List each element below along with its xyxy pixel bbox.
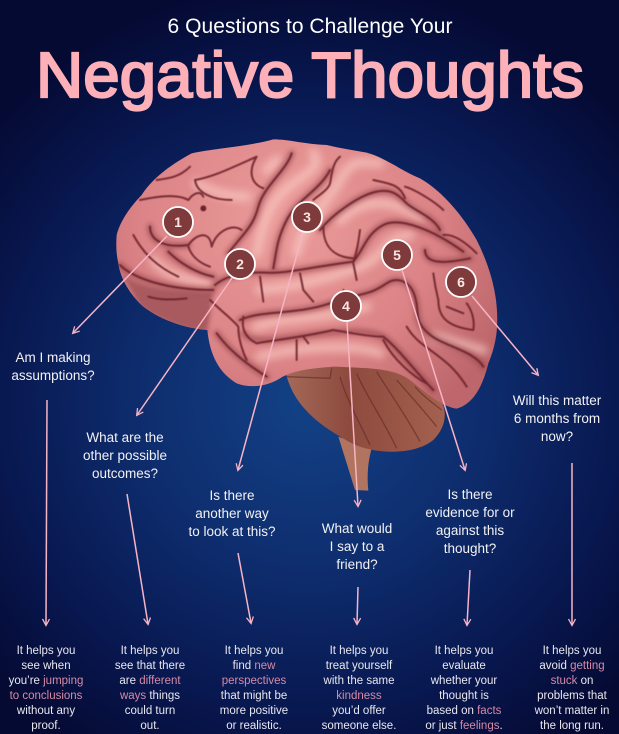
arrow 5 [402,270,465,470]
explanations [9,645,609,732]
lower frontal lobe shade [122,273,213,333]
brain stem [338,437,372,491]
question 5: evidence for or [425,505,515,520]
question 5: against this [436,523,504,538]
explanation 2: out. [140,720,160,732]
badge 1: 1 [174,214,182,230]
explanation 3: more positive [220,705,288,717]
question 2: other possible [83,448,167,463]
question 1: Am I making [15,350,91,365]
questions [11,350,602,572]
explanation 1: see when [21,660,71,672]
explanation 6: the long run. [540,720,604,732]
question 2: What are the [86,430,164,445]
explanation 1: to conclusions [10,690,83,702]
explanation 5: or just feelings. [425,720,503,732]
badge 6: 6 [457,274,465,290]
explanation 6: problems that [537,690,608,702]
explanation 1: without any [16,705,75,717]
number badges [163,202,476,321]
badge 4 [331,291,361,321]
explanation 3: or realistic. [226,720,282,732]
explanation 2: could turn [125,705,175,717]
arrow down 5 [467,570,470,625]
explanation 5: based on facts [427,705,501,717]
cerebrum [116,139,497,409]
cerebellum [285,365,445,452]
explanation 2: ways things [120,690,180,702]
arrow down 4 [357,587,358,624]
question 3: to look at this? [188,524,276,539]
explanation 3: that might be [221,690,287,702]
arrow down 6 [571,463,573,625]
pit on gyrus [200,205,206,211]
subtitle: 6 Questions to Challenge Your [168,15,452,38]
question 3: Is there [209,488,255,503]
explanation 3: find new [233,660,275,672]
question 4: I say to a [330,539,385,554]
explanation 1: proof. [31,720,61,732]
question 2: outcomes? [92,466,158,481]
arrow 4 [347,322,358,506]
explanation 4: you’d offer [332,705,386,717]
highlights [153,153,483,357]
explanation 5: thought is [439,690,489,702]
title: Negative Thoughts [36,39,584,111]
arrow down 1 [46,400,47,625]
explanation 6: avoid getting [539,660,605,672]
badge 3: 3 [303,209,311,225]
question 6: now? [541,429,573,444]
badge 3 [292,202,322,232]
badge 5: 5 [393,247,401,263]
explanation 4: with the same [323,675,394,687]
question 5: thought? [444,541,496,556]
explanation 2: It helps you [121,645,179,657]
brain illustration [116,139,497,491]
badge 5 [382,240,412,270]
explanation 4: It helps you [330,645,388,657]
badge 6 [446,267,476,297]
explanation 2: see that there [115,660,185,672]
explanation 3: It helps you [225,645,283,657]
explanation 4: kindness [336,690,382,702]
badge 2: 2 [236,256,244,272]
arrow down 3 [238,553,251,623]
explanation 3: perspectives [222,675,287,687]
question 5: Is there [447,487,493,502]
crisp fold lines [120,153,483,390]
arrow 1 [73,236,167,333]
question 6: Will this matter [513,393,602,408]
explanation 6: It helps you [543,645,601,657]
question 1: assumptions? [11,368,95,383]
badge 4: 4 [342,298,350,314]
arrow 3 [238,232,303,470]
badge 2 [225,249,255,279]
explanation 5: whether your [430,675,497,687]
question 3: another way [195,506,269,521]
explanation 5: It helps you [435,645,493,657]
explanation 1: you’re jumping [9,675,83,687]
arrow down 2 [127,494,148,624]
badge 1 [163,207,193,237]
explanation 4: treat yourself [326,660,393,672]
explanation 6: stuck on [551,675,593,687]
arrow 2 [137,278,232,415]
explanation 5: evaluate [442,660,486,672]
explanation 6: won’t matter in [534,705,609,717]
explanation 4: someone else. [322,720,396,732]
explanation 2: are different [119,675,181,687]
explanation 1: It helps you [17,645,75,657]
arrow 6 [472,296,538,375]
question 6: 6 months from [514,411,600,426]
soft fold shadows [120,153,483,390]
question 4: friend? [336,557,378,572]
brain folds [120,153,483,390]
question 4: What would [322,521,392,536]
